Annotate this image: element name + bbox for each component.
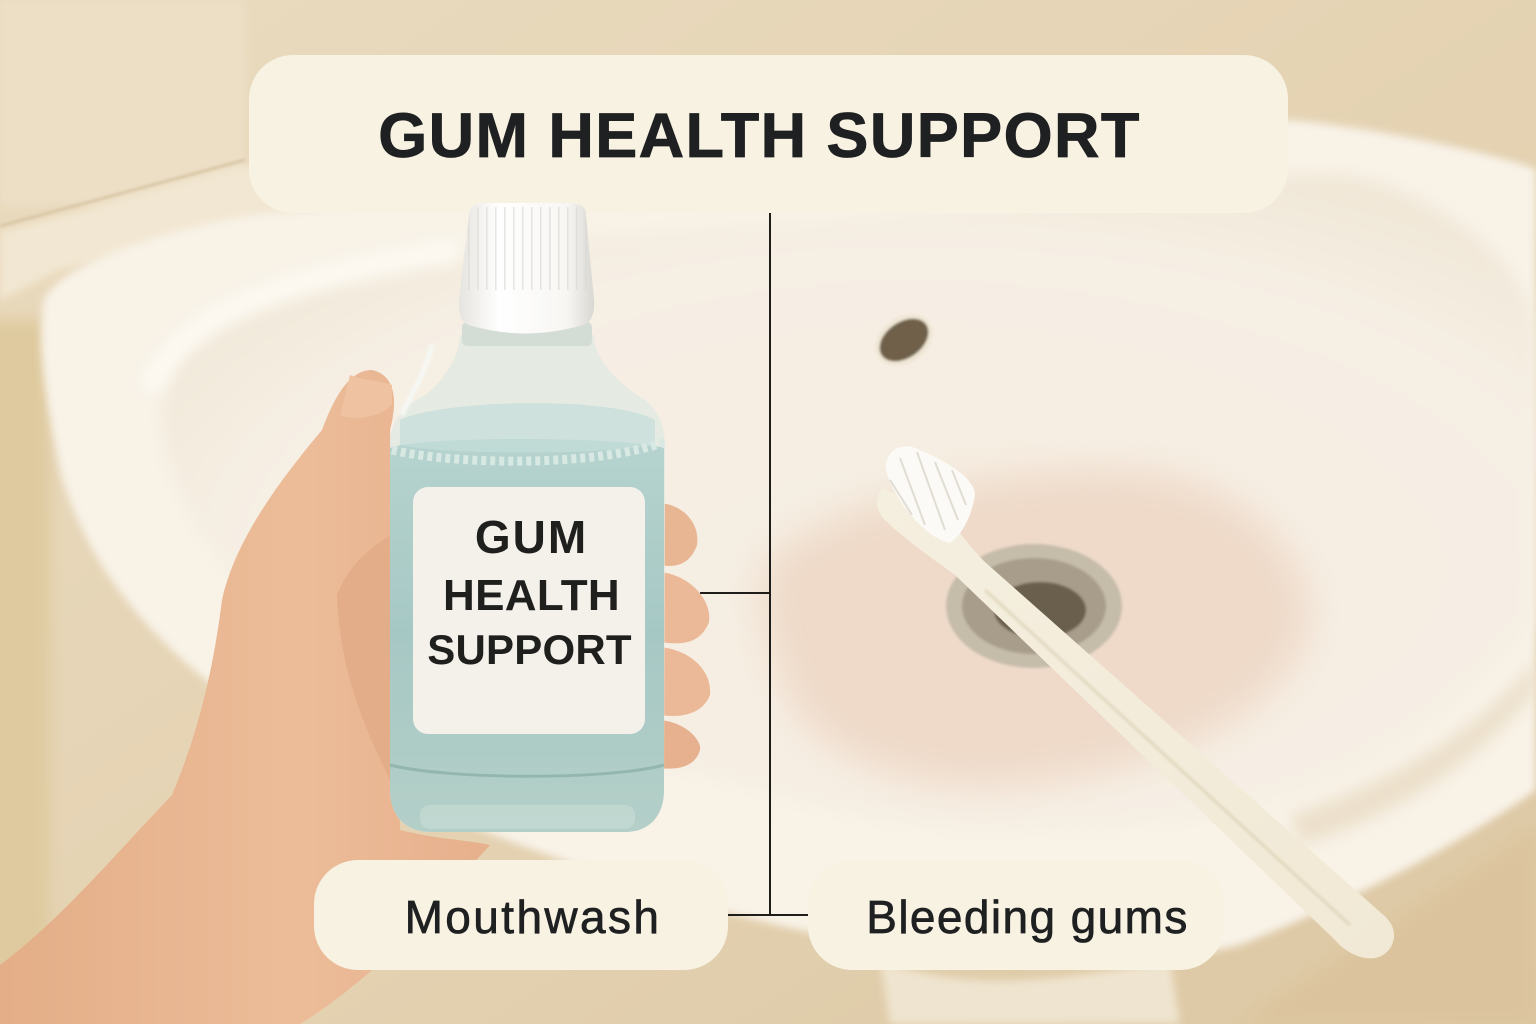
liquid <box>390 439 664 832</box>
foam <box>392 442 664 461</box>
label pill: Bleeding gums <box>808 860 1224 970</box>
label <box>413 487 645 734</box>
label pill: Bleeding gums: Bleeding gums <box>866 891 1189 943</box>
cap <box>459 203 594 334</box>
label text: HEALTH <box>443 571 620 620</box>
neck <box>462 322 592 346</box>
upper tint <box>400 403 655 452</box>
highlight <box>402 345 432 415</box>
title panel <box>249 55 1288 213</box>
overflow hole <box>865 303 943 377</box>
icon: toothbrush <box>877 446 1394 958</box>
drain <box>946 544 1122 668</box>
icon: mouthwash bottle <box>390 203 665 832</box>
label pill: Mouthwash: Mouthwash <box>405 891 661 943</box>
bottom band <box>390 765 664 776</box>
label text: SUPPORT <box>427 626 632 673</box>
label pill: Mouthwash <box>314 860 728 970</box>
connector lines <box>700 212 808 915</box>
icon: hand behind bottle <box>0 370 710 1024</box>
label text: GUM <box>475 511 588 563</box>
bottle body <box>390 335 665 832</box>
cap ridges <box>462 207 592 290</box>
title text: GUM HEALTH SUPPORT <box>378 101 1141 171</box>
sink pedestal <box>880 960 1180 1024</box>
